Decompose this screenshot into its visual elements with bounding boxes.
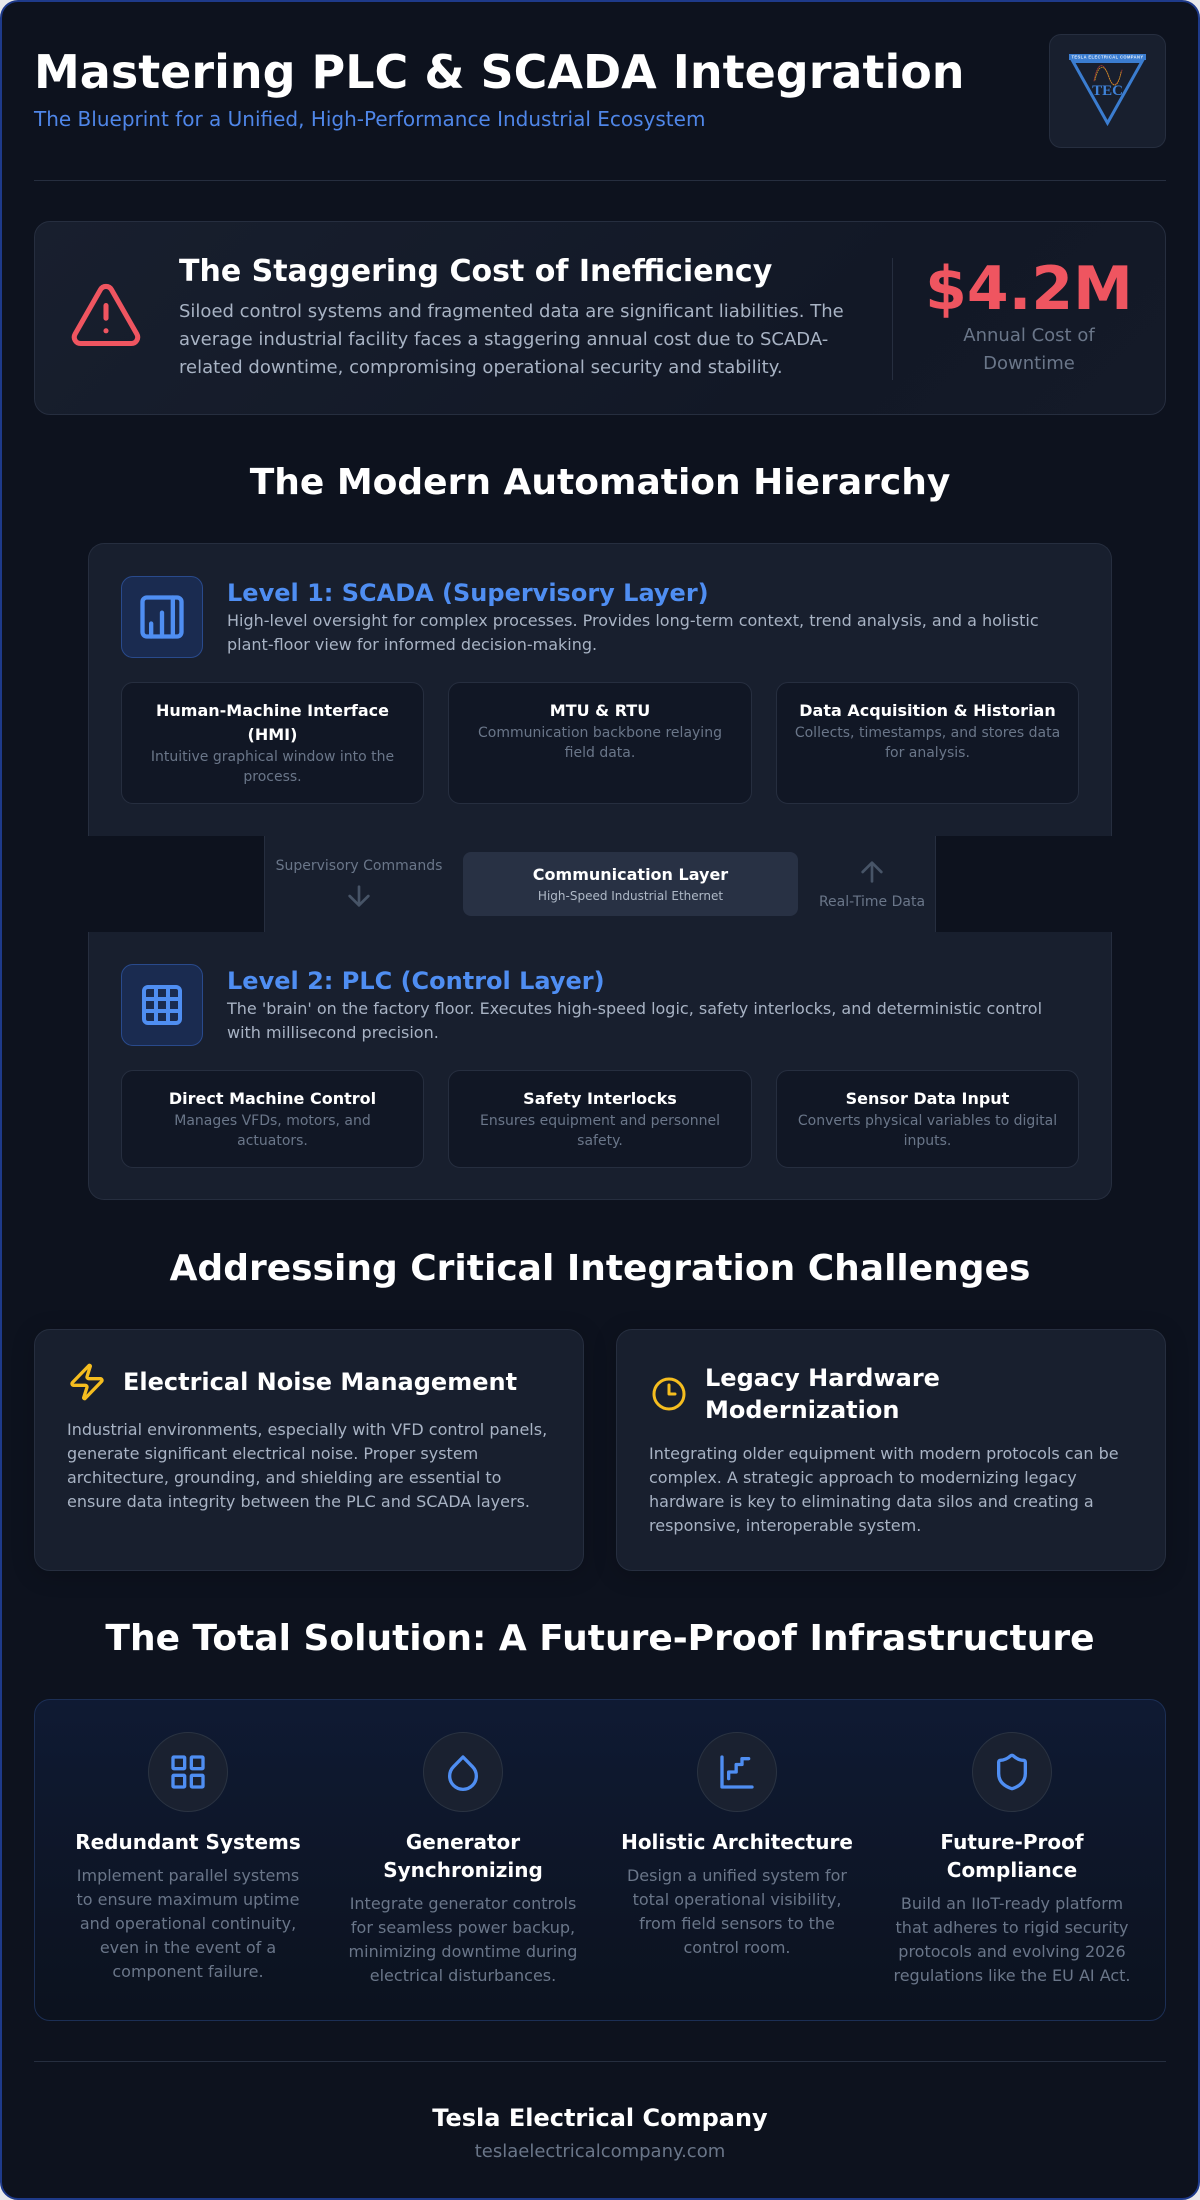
panel: automation hierarchy [88,543,1112,1200]
card: direct machine control [121,1070,424,1168]
pillar title: Generator [406,1830,520,1854]
title: Mastering PLC & SCADA Integration [34,45,965,99]
heading: challenges: Addressing Critical Integration Challenges [170,1248,1030,1289]
level 1 description: High-level oversight for complex processes. Provides long-term context, trend analysis, and a holistic [227,611,1039,630]
card: direct machine control: actuators. [237,1133,308,1149]
pillar: redundant systems [75,1732,301,1981]
cost description: Siloed control systems and fragmented data are significant liabilities. The [179,301,844,322]
legacy text [649,1444,1119,1535]
level 1 description: plant-floor view for informed decision-making. [227,635,597,654]
footer [432,2104,768,2162]
legacy text: complex. A strategic approach to modernizing legacy [649,1468,1077,1487]
pillar text: even in the event of a [100,1938,276,1957]
statistic: annual cost of downtime [892,258,1166,380]
website: teslaelectricalcompany.com [475,2141,725,2162]
pillar title: Redundant Systems [75,1830,301,1854]
comm title: Communication Layer [533,865,728,884]
legacy heading: Legacy Hardware [705,1364,940,1392]
noise text: architecture, grounding, and shielding are essential to [67,1468,501,1487]
legacy heading [705,1364,940,1424]
card: data acquisition: for analysis. [885,745,970,761]
card: electrical noise [34,1329,584,1571]
noise text [67,1420,547,1511]
panel: total solution [34,1699,1166,2021]
card: direct machine control: Manages VFDs, motors, and [174,1113,371,1129]
level 2 description: with millisecond precision. [227,1023,439,1042]
panel: level 1 SCADA [88,543,1112,836]
card: sensor data input: Converts physical variables to digital [798,1113,1057,1129]
icon: warning triangle [72,284,140,346]
logo: Tesla Electrical Company badge [1049,34,1166,148]
pillar text: for seamless power backup, [351,1918,575,1937]
card: legacy hardware [616,1329,1166,1571]
icon: shield [972,1732,1052,1812]
stat caption: Annual Cost of [963,325,1095,346]
level 2 title: Level 2: PLC (Control Layer) [227,967,605,995]
pillar text [349,1894,577,1985]
legacy text: responsive, interoperable system. [649,1516,921,1535]
company name: Tesla Electrical Company [432,2104,768,2132]
comm subtitle: High-Speed Industrial Ethernet [538,889,723,903]
pillar text: and operational continuity, [80,1914,296,1933]
subtitle: The Blueprint for a Unified, High-Performance Industrial Ecosystem [34,107,705,131]
icon: bar chart [121,576,203,658]
legacy heading: Modernization [705,1396,899,1424]
pillar text [893,1894,1131,1985]
pillar title: Future-Proof [940,1830,1084,1854]
stat caption [963,325,1096,374]
pillar text: control room. [683,1938,791,1957]
pillar text: Integrate generator controls [350,1894,576,1913]
card: safety interlocks: Safety Interlocks [523,1089,677,1108]
cost description [179,301,844,378]
card: sensor data input: Sensor Data Input [846,1089,1009,1108]
pillar text: to ensure maximum uptime [77,1890,299,1909]
level 2 description: The 'brain' on the factory floor. Executes high-speed logic, safety interlocks, and deterministic control [227,999,1042,1018]
noise text: generate significant electrical noise. Proper system [67,1444,478,1463]
noise text: Industrial environments, especially with VFD control panels, [67,1420,547,1439]
pillar text: from field sensors to the [639,1914,835,1933]
cost heading: The Staggering Cost of Inefficiency [179,254,772,289]
pillar text: total operational visibility, [633,1890,841,1909]
logo: Tesla Electrical Company badge: TESLA ELECTRICAL COMPANY [1071,55,1144,60]
card: MTU and RTU: field data. [565,745,635,761]
card: safety interlocks [448,1070,752,1168]
pillar text: electrical disturbances. [370,1966,556,1985]
supervisory commands label: Supervisory Commands [276,858,442,874]
pillar title: Holistic Architecture [621,1830,853,1854]
icon: droplet [423,1732,503,1812]
pillar text: that adheres to rigid security [896,1918,1128,1937]
pillar text: Design a unified system for [627,1866,847,1885]
pillar text: Build an IIoT-ready platform [901,1894,1123,1913]
panel: level 2 PLC [88,932,1112,1200]
pillar text: minimizing downtime during [349,1942,577,1961]
pillar title [383,1830,543,1882]
card: HMI: Intuitive graphical window into the [151,749,394,765]
card: MTU and RTU: Communication backbone relaying [478,725,722,741]
legacy text: Integrating older equipment with modern protocols can be [649,1444,1119,1463]
arrow: down [348,886,370,907]
logo: Tesla Electrical Company badge: TEC [1092,83,1123,99]
stat value: $4.2M [925,254,1133,324]
heading: total solution: The Total Solution: A Future-Proof Infrastructure [105,1618,1095,1659]
card: safety interlocks: safety. [577,1133,623,1149]
icon: clock [652,1378,686,1410]
icon: grid [121,964,203,1046]
icon: grid squares [148,1732,228,1812]
card: HMI [121,682,424,804]
level 1 description [227,611,1039,654]
pillar text: regulations like the EU AI Act. [893,1966,1131,1985]
cost description: related downtime, compromising operational security and stability. [179,357,783,378]
pillar text: component failure. [112,1962,264,1981]
pillar title [940,1830,1084,1882]
pillar text [627,1866,847,1957]
pillar: generator synchronizing [349,1732,577,1985]
real-time data label: Real-Time Data [819,894,925,910]
pillar text [76,1866,299,1981]
icon: stepped chart [697,1732,777,1812]
card: sensor data input [776,1070,1079,1168]
arrow: up [861,861,883,883]
panel: cost of inefficiency [34,221,1166,415]
card: HMI: (HMI) [248,725,297,744]
card: data acquisition [776,682,1079,804]
header [34,34,1166,148]
level 1 title: Level 1: SCADA (Supervisory Layer) [227,579,709,607]
card: data acquisition: Collects, timestamps, and stores data [795,725,1060,741]
communication band [264,836,936,932]
pillar: future-proof compliance [893,1732,1131,1985]
card: sensor data input: inputs. [904,1133,951,1149]
communication layer box [463,852,798,916]
card: safety interlocks: Ensures equipment and personnel [480,1113,720,1129]
card: HMI: Human-Machine Interface [156,701,389,720]
noise text: ensure data integrity between the PLC and SCADA layers. [67,1492,530,1511]
card: MTU and RTU: MTU & RTU [550,701,650,720]
level 2 description [226,999,1042,1042]
stat caption: Downtime [983,353,1075,374]
pillar text: protocols and evolving 2026 [898,1942,1126,1961]
card: data acquisition: Data Acquisition & Historian [799,701,1056,720]
pillar title: Compliance [947,1858,1077,1882]
pillar text: Implement parallel systems [77,1866,299,1885]
heading: hierarchy: The Modern Automation Hierarchy [250,462,950,503]
pillar: holistic architecture [621,1732,853,1957]
card: HMI: process. [243,769,302,785]
noise heading: Electrical Noise Management [123,1368,517,1396]
card: MTU and RTU [448,682,752,804]
icon: lightning [70,1364,104,1400]
card: direct machine control: Direct Machine Control [169,1089,376,1108]
cost description: average industrial facility faces a staggering annual cost due to SCADA- [179,329,828,350]
legacy text: hardware is key to eliminating data silos and creating a [649,1492,1094,1511]
pillar title: Synchronizing [383,1858,543,1882]
